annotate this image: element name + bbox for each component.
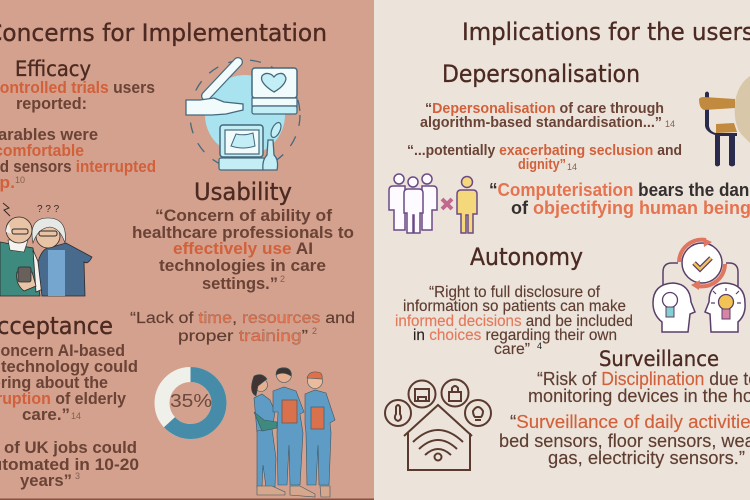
text block: usability quote: effectively use AI: [173, 240, 313, 258]
panel: right background: [374, 0, 750, 500]
heading: autonomy: Autonomy: [470, 243, 583, 271]
chart: 35 percent donut: [162, 374, 219, 432]
text block: depersonalisation quotes: “...potentially exacerbating seclusion and: [407, 143, 682, 159]
text block: surveillance quote: “Surveillance of daily activities: [510, 411, 750, 432]
text block: autonomy quote: “Right to full disclosure of: [429, 284, 601, 301]
text block: autonomy quote: 4: [537, 341, 542, 351]
text block: depersonalisation quotes: dignity”: [518, 157, 566, 173]
text block: autonomy quote: care”: [494, 341, 530, 358]
text block: acceptance quote: technology could: [1, 358, 138, 376]
text block: usability quote: settings.”: [202, 275, 278, 293]
text block: autonomy quote: in choices regarding their own: [413, 327, 617, 344]
heading: depersonalisation: Depersonalisation: [442, 60, 640, 88]
text block: UK jobs quote: years”: [20, 472, 72, 490]
icon: elderly couple looking at phone: [0, 203, 92, 296]
text block: lack of time quote: 2: [312, 326, 317, 336]
text block: acceptance quote: care.”: [22, 406, 70, 424]
icon: medical devices: [186, 60, 300, 170]
text block: usability quote: technologies in care: [159, 257, 326, 275]
text block: autonomy quote: informed decisions and be included: [395, 313, 633, 330]
panel: left background: [0, 0, 374, 499]
text block: depersonalisation quotes: 14: [665, 119, 675, 129]
icon: elderly couple looking at phone: ? ? ?: [37, 204, 60, 215]
text block: autonomy quote: information so patients can make: [403, 298, 626, 315]
icon: three healthcare workers: [251, 368, 335, 497]
text block: UK jobs quote: [0, 439, 139, 490]
text block: acceptance quote: 14: [71, 411, 81, 421]
panel: bottom edge: [0, 498, 374, 500]
icon: two heads with light bulbs and cycle: [653, 238, 745, 332]
text block: surveillance quote: gas, electricity sensors.”: [548, 447, 745, 468]
text block: depersonalisation quotes: “Depersonalisation of care through: [425, 101, 664, 117]
heading: surveillance: Surveillance: [599, 347, 719, 371]
text block: lack of time quote: [130, 310, 355, 345]
text block: discipline quote: [528, 369, 750, 406]
text block: efficacy: [0, 79, 156, 192]
text block: acceptance quote: [0, 342, 138, 424]
text block: efficacy: reported:: [16, 95, 87, 113]
text block: lack of time quote: “Lack of time, resources and: [130, 310, 355, 327]
text block: usability quote: [132, 207, 354, 293]
text block: UK jobs quote: 3: [75, 471, 80, 481]
text block: lack of time quote: proper training ”: [178, 328, 308, 345]
text block: UK jobs quote: of UK jobs could: [4, 439, 137, 457]
text block: autonomy quote: [395, 284, 633, 358]
icon: smart home: [385, 380, 491, 470]
text block: depersonalisation quotes: 14: [567, 162, 577, 172]
icon: group of people versus one person: [389, 174, 477, 233]
heading: efficacy: Efficacy: [15, 57, 91, 81]
text block: usability quote: healthcare professionals to: [132, 224, 354, 242]
heading: usability: Usability: [194, 178, 292, 206]
text block: depersonalisation quotes: [407, 101, 682, 173]
text block: computerisation quote: [489, 179, 750, 218]
icon: person on chair: [699, 76, 750, 166]
chart: 35 percent donut: 35%: [170, 391, 212, 411]
text block: efficacy: 10: [15, 175, 25, 185]
text block: usability quote: 2: [280, 274, 285, 284]
text block: usability quote: “Concern of ability of: [155, 207, 333, 225]
text block: surveillance quote: [499, 411, 750, 468]
text block: depersonalisation quotes: algorithm-based standardisation...”: [420, 115, 662, 131]
